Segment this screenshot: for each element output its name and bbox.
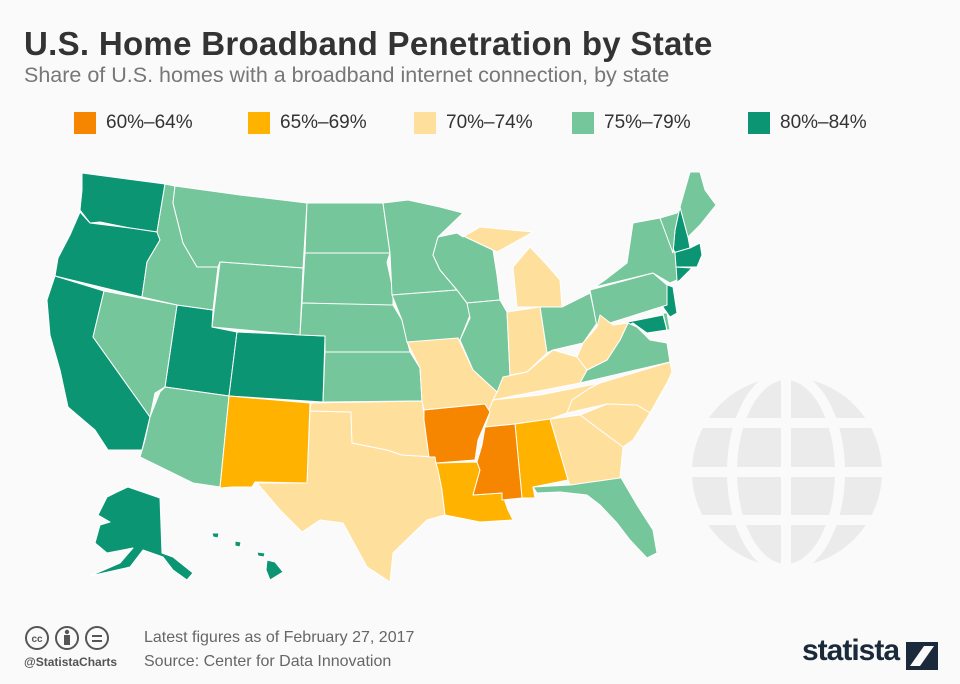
legend item 70-74 [414,112,533,134]
legend item 75-79: 75%–79% [604,112,691,133]
license icons [25,626,109,650]
statista logo [802,634,938,670]
twitter handle: @StatistaCharts [24,655,117,669]
dark green states [47,173,702,580]
legend item 60-64 [74,112,193,134]
legend item 65-69 [248,112,367,134]
legend item 80-84: 80%–84% [780,112,867,133]
footer notes [144,629,414,670]
legend item 75-79 [572,112,691,134]
amber states [220,396,568,522]
legend item 60-64: 60%–64% [106,112,193,133]
orange states [424,404,522,500]
legend item 65-69: 65%–69% [280,112,367,133]
license icons: cc [31,634,43,645]
statista logo: statista [802,634,899,667]
footer notes: Latest figures as of February 27, 2017 [144,629,414,646]
light green states [93,172,716,558]
pale yellow states [257,227,672,582]
legend item 70-74: 70%–74% [446,112,533,133]
legend item 80-84 [748,112,867,134]
legend [74,112,867,134]
title: U.S. Home Broadband Penetration by State [24,25,713,62]
footer notes: Source: Center for Data Innovation [144,653,391,670]
subtitle: Share of U.S. homes with a broadband internet connection, by state [24,63,669,87]
